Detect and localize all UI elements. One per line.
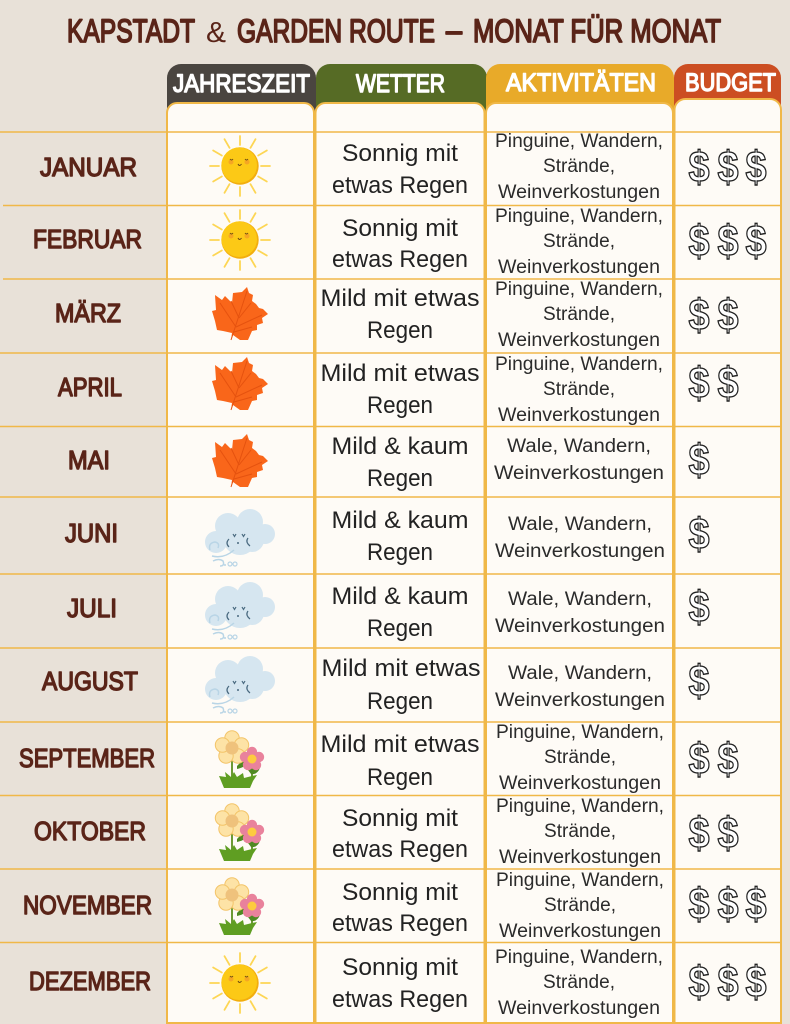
header: Wetter: WETTER	[356, 70, 445, 98]
activities: Strände,	[544, 747, 616, 768]
weather: etwas Regen	[332, 246, 468, 273]
budget: $	[718, 291, 738, 340]
activities: Weinverkostungen	[498, 998, 660, 1019]
activities: Weinverkostungen	[498, 182, 660, 203]
row: September: SEPTEMBER	[19, 743, 155, 773]
budget: $	[746, 217, 766, 266]
activities: Weinverkostungen	[495, 690, 665, 711]
budget: $	[718, 880, 738, 929]
activities: Strände,	[544, 821, 616, 842]
activities: Pinguine, Wandern,	[496, 722, 664, 743]
icon: wind cloud	[205, 582, 275, 639]
header: Budget: BUDGET	[685, 69, 776, 97]
weather: Sonnig mit	[342, 954, 458, 981]
budget: $	[746, 143, 766, 192]
row: Mai	[68, 433, 710, 492]
row: März	[55, 279, 738, 351]
activities	[495, 354, 663, 426]
activities: Weinverkostungen	[499, 921, 661, 942]
weather: Regen	[367, 392, 433, 419]
icon: sun	[210, 136, 270, 196]
activities	[495, 514, 665, 562]
budget: $	[718, 735, 738, 784]
weather: Regen	[367, 465, 433, 492]
activities: Wale, Wandern,	[507, 436, 651, 457]
activities: Pinguine, Wandern,	[496, 870, 664, 891]
title	[67, 12, 721, 49]
weather	[332, 805, 468, 863]
icon: sun	[210, 953, 270, 1013]
budget: $	[688, 510, 710, 559]
activities	[495, 131, 663, 203]
row: Mai: MAI	[68, 445, 110, 475]
weather: Mild mit etwas	[320, 360, 480, 387]
budget	[688, 143, 766, 192]
budget: $	[718, 809, 738, 858]
row: August: AUGUST	[42, 666, 138, 696]
activities: Weinverkostungen	[495, 541, 665, 562]
row: November	[23, 870, 766, 942]
activities: Strände,	[543, 379, 615, 400]
weather	[320, 731, 480, 791]
activities	[496, 796, 664, 868]
icon: flowers	[215, 878, 264, 935]
weather	[332, 879, 468, 937]
title: &	[206, 17, 226, 49]
budget: $	[688, 143, 710, 192]
budget	[688, 359, 738, 408]
activities: Weinverkostungen	[494, 463, 664, 484]
row: September	[19, 722, 738, 794]
header: Wetter	[316, 64, 487, 112]
row: Juli: JULI	[67, 593, 117, 623]
weather	[332, 433, 468, 492]
header: Budget	[674, 64, 781, 108]
activities: Weinverkostungen	[498, 405, 660, 426]
weather: etwas Regen	[332, 910, 468, 937]
weather: etwas Regen	[332, 172, 468, 199]
row: Januar	[40, 131, 766, 203]
icon: leaf	[212, 434, 268, 487]
activities: Weinverkostungen	[498, 330, 660, 351]
budget	[688, 735, 738, 784]
budget: $	[718, 359, 738, 408]
activities: Weinverkostungen	[498, 257, 660, 278]
activities	[495, 947, 663, 1019]
weather	[332, 215, 468, 273]
header: Aktivitaeten	[486, 64, 674, 112]
activities: Wale, Wandern,	[508, 663, 652, 684]
activities: Wale, Wandern,	[508, 589, 652, 610]
activities	[494, 436, 664, 484]
weather	[332, 140, 468, 199]
icon: leaf	[212, 287, 268, 340]
activities: Strände,	[543, 304, 615, 325]
weather: Mild & kaum	[332, 433, 468, 460]
activities: Strände,	[543, 156, 615, 177]
activities: Pinguine, Wandern,	[495, 206, 663, 227]
weather	[332, 507, 468, 566]
budget	[688, 880, 766, 929]
weather: Regen	[367, 317, 433, 344]
budget	[688, 291, 738, 340]
activities: Weinverkostungen	[499, 847, 661, 868]
weather: Sonnig mit	[342, 879, 458, 906]
activities: Wale, Wandern,	[508, 514, 652, 535]
budget: $	[688, 359, 710, 408]
activities: Pinguine, Wandern,	[496, 796, 664, 817]
activities	[495, 279, 663, 351]
icon: wind cloud	[205, 656, 275, 713]
budget: $	[688, 880, 710, 929]
row: Juni	[65, 507, 710, 566]
icon: wind cloud	[205, 509, 275, 566]
icon: sun	[210, 210, 270, 270]
weather: etwas Regen	[332, 836, 468, 863]
budget: $	[688, 735, 710, 784]
weather: Regen	[367, 764, 433, 791]
icon: flowers	[215, 804, 264, 861]
budget	[688, 809, 738, 858]
weather	[320, 285, 480, 344]
row: Dezember	[29, 947, 766, 1019]
row: Oktober: OKTOBER	[34, 816, 146, 846]
budget: $	[688, 809, 710, 858]
activities: Weinverkostungen	[499, 773, 661, 794]
header: Jahreszeit	[167, 64, 316, 112]
weather: Regen	[367, 615, 433, 642]
weather: Mild mit etwas	[320, 285, 480, 312]
activities	[495, 663, 665, 711]
budget: $	[688, 291, 710, 340]
budget: $	[688, 657, 710, 706]
activities: Strände,	[544, 895, 616, 916]
weather: Regen	[367, 688, 433, 715]
row: Juli	[67, 582, 710, 642]
activities: Strände,	[543, 972, 615, 993]
budget: $	[718, 958, 738, 1007]
row: August	[42, 655, 710, 715]
budget: $	[746, 880, 766, 929]
weather: Sonnig mit	[342, 805, 458, 832]
weather	[322, 655, 480, 715]
weather: Sonnig mit	[342, 140, 458, 167]
icon: leaf	[212, 357, 268, 410]
activities	[495, 589, 665, 637]
activities: Pinguine, Wandern,	[495, 131, 663, 152]
activities	[496, 722, 664, 794]
row: April	[58, 354, 738, 426]
row: November: NOVEMBER	[23, 890, 152, 920]
weather: Mild & kaum	[332, 583, 468, 610]
budget: $	[746, 958, 766, 1007]
weather: Mild & kaum	[332, 507, 468, 534]
row: Januar: JANUAR	[40, 152, 137, 182]
activities: Pinguine, Wandern,	[495, 354, 663, 375]
title: GARDEN ROUTE	[237, 13, 435, 49]
weather: Sonnig mit	[342, 215, 458, 242]
activities	[496, 870, 664, 942]
budget: $	[688, 958, 710, 1007]
row: April: APRIL	[58, 372, 122, 402]
row: Oktober	[34, 796, 738, 868]
budget	[688, 217, 766, 266]
budget: $	[688, 583, 710, 632]
budget	[688, 958, 766, 1007]
row: Februar: FEBRUAR	[33, 224, 142, 254]
title: KAPSTADT	[67, 13, 195, 49]
icon: flowers	[215, 731, 264, 788]
row: Dezember: DEZEMBER	[29, 966, 151, 996]
activities: Weinverkostungen	[495, 616, 665, 637]
budget: $	[718, 143, 738, 192]
budget: $	[688, 217, 710, 266]
title: –	[446, 12, 462, 48]
activities: Pinguine, Wandern,	[495, 947, 663, 968]
weather	[332, 954, 468, 1013]
weather	[332, 583, 468, 642]
column cards	[167, 99, 781, 1023]
activities	[495, 206, 663, 278]
weather: etwas Regen	[332, 986, 468, 1013]
weather: Mild mit etwas	[322, 655, 480, 682]
activities: Pinguine, Wandern,	[495, 279, 663, 300]
budget: $	[718, 217, 738, 266]
header: Aktivitaeten: AKTIVITÄTEN	[506, 69, 656, 97]
row: März: MÄRZ	[55, 298, 121, 328]
row: Juni: JUNI	[65, 518, 118, 548]
title: MONAT FÜR MONAT	[473, 13, 721, 49]
weather	[320, 360, 480, 419]
budget: $	[688, 436, 710, 485]
row: Februar	[33, 206, 766, 278]
weather: Regen	[367, 539, 433, 566]
weather: Mild mit etwas	[320, 731, 480, 758]
header: Jahreszeit: JAHRESZEIT	[173, 70, 310, 98]
activities: Strände,	[543, 231, 615, 252]
